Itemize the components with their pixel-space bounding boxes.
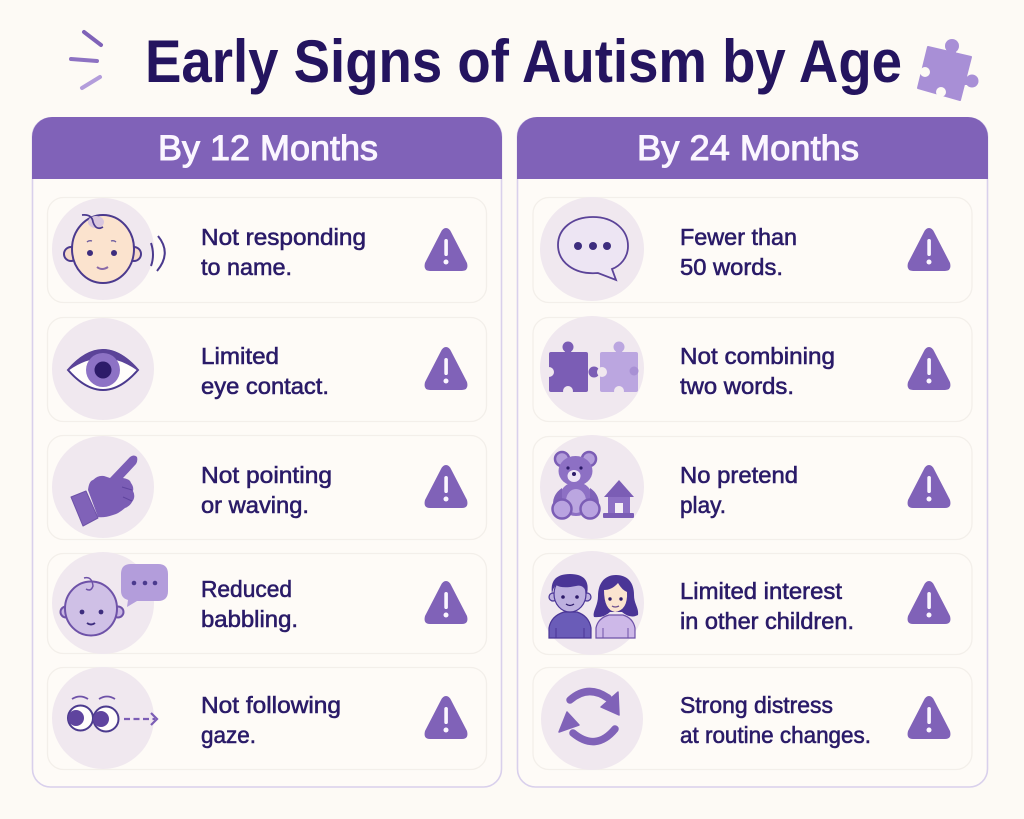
icon: cycle arrows [559, 691, 619, 742]
text [201, 462, 332, 518]
text: Not combining [680, 343, 835, 369]
icon: two puzzle pieces [544, 342, 638, 396]
text: Limited interest [680, 578, 842, 604]
row: no pretend play [533, 435, 972, 540]
icon: warning [908, 696, 950, 739]
icon: two children [549, 574, 638, 638]
text: Not responding [201, 224, 366, 250]
row: limited eye contact [48, 318, 486, 422]
text [201, 576, 298, 632]
text [201, 343, 329, 399]
panel header [517, 117, 988, 179]
icon: warning [425, 465, 467, 508]
icon: warning [908, 581, 950, 624]
icon: warning [908, 228, 950, 271]
icon: baby with speech bubble [60, 564, 168, 636]
icon: baby with sound waves [64, 215, 165, 283]
text: Strong distress [680, 692, 833, 718]
text: babbling. [201, 606, 298, 632]
panel header [32, 117, 502, 179]
row: fewer than 50 words [533, 197, 972, 302]
row: not responding to name [48, 198, 486, 302]
text [680, 462, 798, 518]
text: in other children. [680, 608, 854, 634]
row: not following gaze [48, 667, 486, 770]
text [680, 692, 871, 748]
icon: sparkle lines [71, 32, 101, 88]
icon: teddy bear and toy house [552, 452, 634, 518]
icon: eye [68, 350, 138, 390]
panel header: By 12 Months [158, 129, 378, 168]
panel: by 12 months [32, 117, 502, 787]
icon: speech bubble [558, 217, 628, 280]
panel frame [518, 118, 988, 787]
text: at routine changes. [680, 722, 871, 748]
icon: warning [425, 228, 467, 271]
row: reduced babbling [48, 552, 486, 654]
text: Not following [201, 692, 341, 718]
panel header: By 24 Months [637, 129, 859, 168]
row: not combining two words [533, 316, 972, 422]
text [201, 692, 341, 748]
text: Reduced [201, 576, 292, 602]
icon: warning [908, 347, 950, 390]
icon: warning [908, 465, 950, 508]
text [201, 224, 366, 280]
text [680, 224, 797, 280]
text [680, 578, 854, 634]
icon: puzzle piece [918, 39, 978, 100]
row: limited interest in other children [533, 551, 972, 655]
text: or waving. [201, 492, 309, 518]
row: strong distress at routine changes [533, 668, 972, 770]
text: play. [680, 492, 726, 518]
text: eye contact. [201, 373, 329, 399]
text: two words. [680, 373, 794, 399]
text [680, 343, 835, 399]
icon: pointing hand [71, 456, 137, 526]
icon: warning [425, 696, 467, 739]
text: 50 words. [680, 254, 783, 280]
text: No pretend [680, 462, 798, 488]
icon: eyes with dashed arrow [68, 696, 157, 732]
panel frame [32, 118, 502, 787]
panel: by 24 months [517, 117, 988, 787]
text: to name. [201, 254, 292, 280]
row: not pointing or waving [48, 436, 486, 540]
title: Early Signs of Autism by Age [145, 28, 902, 95]
text: Fewer than [680, 224, 797, 250]
text: Limited [201, 343, 279, 369]
icon: warning [425, 581, 467, 624]
text: gaze. [201, 722, 256, 748]
icon: warning [425, 347, 467, 390]
text: Not pointing [201, 462, 332, 488]
